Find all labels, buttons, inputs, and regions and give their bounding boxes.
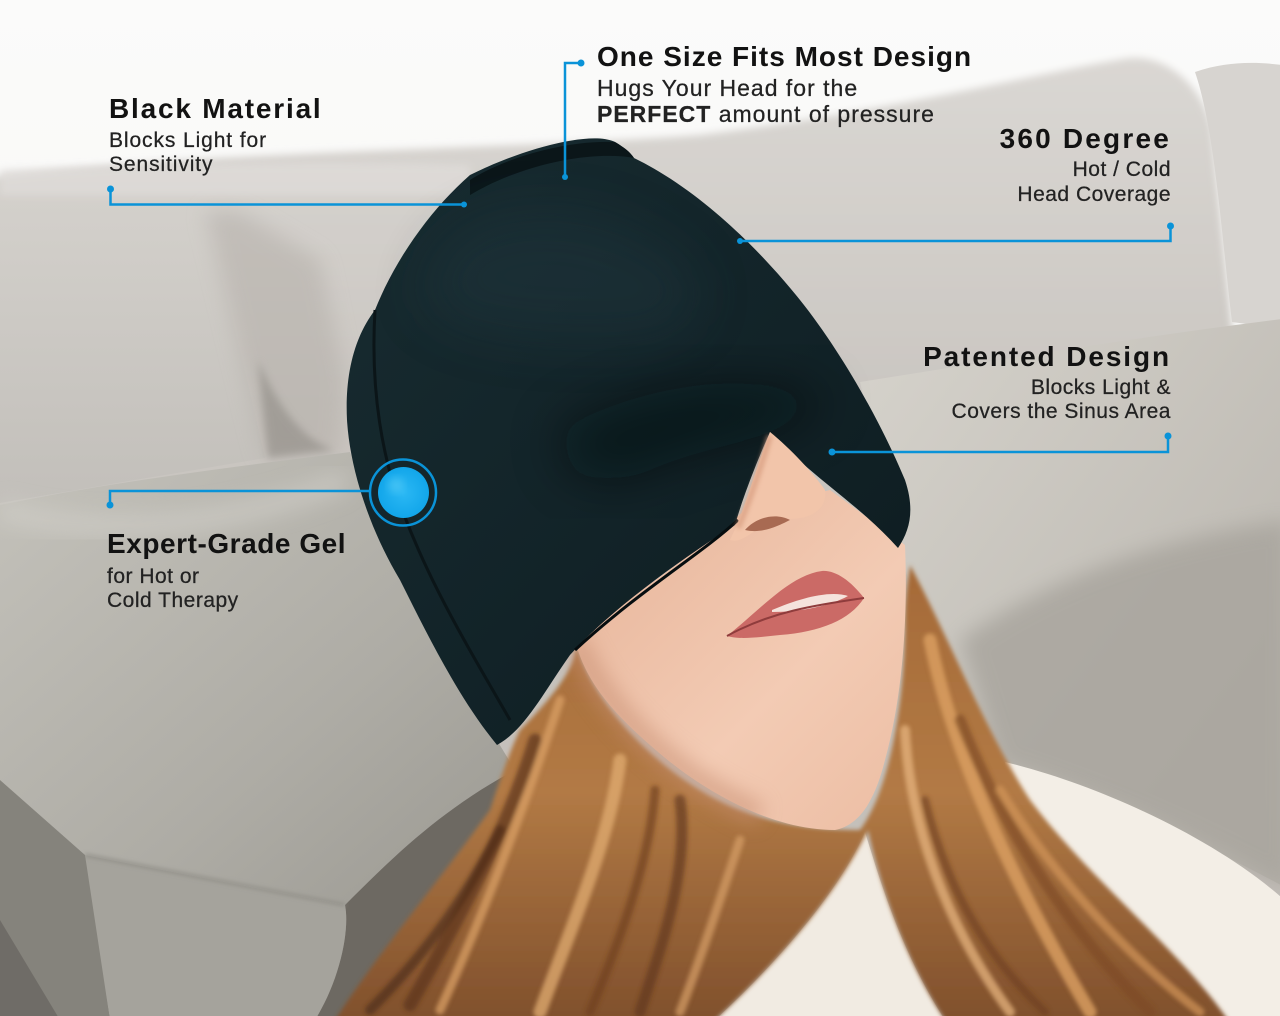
hair — [335, 565, 1228, 1016]
face — [575, 490, 906, 830]
lower left floor shadow — [0, 770, 130, 1016]
icon: nose — [730, 432, 825, 541]
text: expert-grade gel: for Hot or — [107, 565, 200, 588]
callout lines — [106, 60, 1174, 508]
text: black material: Sensitivity — [109, 152, 213, 176]
text: patented design — [923, 341, 1171, 422]
line: black material — [107, 186, 467, 208]
text: one size fits most: One Size Fits Most Design — [597, 41, 972, 72]
text: one size fits most: Hugs Your Head for the — [597, 75, 858, 101]
text: 360 degree: Head Coverage — [1017, 182, 1171, 206]
lips — [727, 571, 864, 638]
right pillow — [860, 318, 1280, 890]
text: one size fits most — [597, 41, 972, 128]
icon: gel circle — [370, 460, 436, 526]
text: black material: Black Material — [109, 93, 323, 124]
text: black material: Blocks Light for — [109, 129, 267, 152]
text: 360 degree: 360 Degree — [1000, 123, 1171, 154]
line: 360 degree — [737, 222, 1174, 244]
text: expert-grade gel: Cold Therapy — [107, 588, 239, 612]
sweater — [345, 762, 1280, 1016]
line: one size — [562, 60, 584, 180]
line: gel — [106, 491, 370, 508]
text: 360 degree — [1000, 123, 1171, 206]
text: patented design: Patented Design — [923, 341, 1171, 372]
text: 360 degree: Hot / Cold — [1073, 158, 1171, 181]
text: black material — [109, 93, 323, 176]
line: patented — [828, 432, 1172, 456]
cap — [347, 138, 910, 745]
text: patented design: Covers the Sinus Area — [952, 400, 1171, 422]
text: expert-grade gel — [107, 528, 346, 612]
text: expert-grade gel: Expert-Grade Gel — [107, 528, 346, 559]
text: patented design: Blocks Light & — [1031, 376, 1171, 399]
left pillow — [0, 452, 515, 1016]
text: one size fits most: PERFECT amount of pressure — [597, 101, 935, 127]
